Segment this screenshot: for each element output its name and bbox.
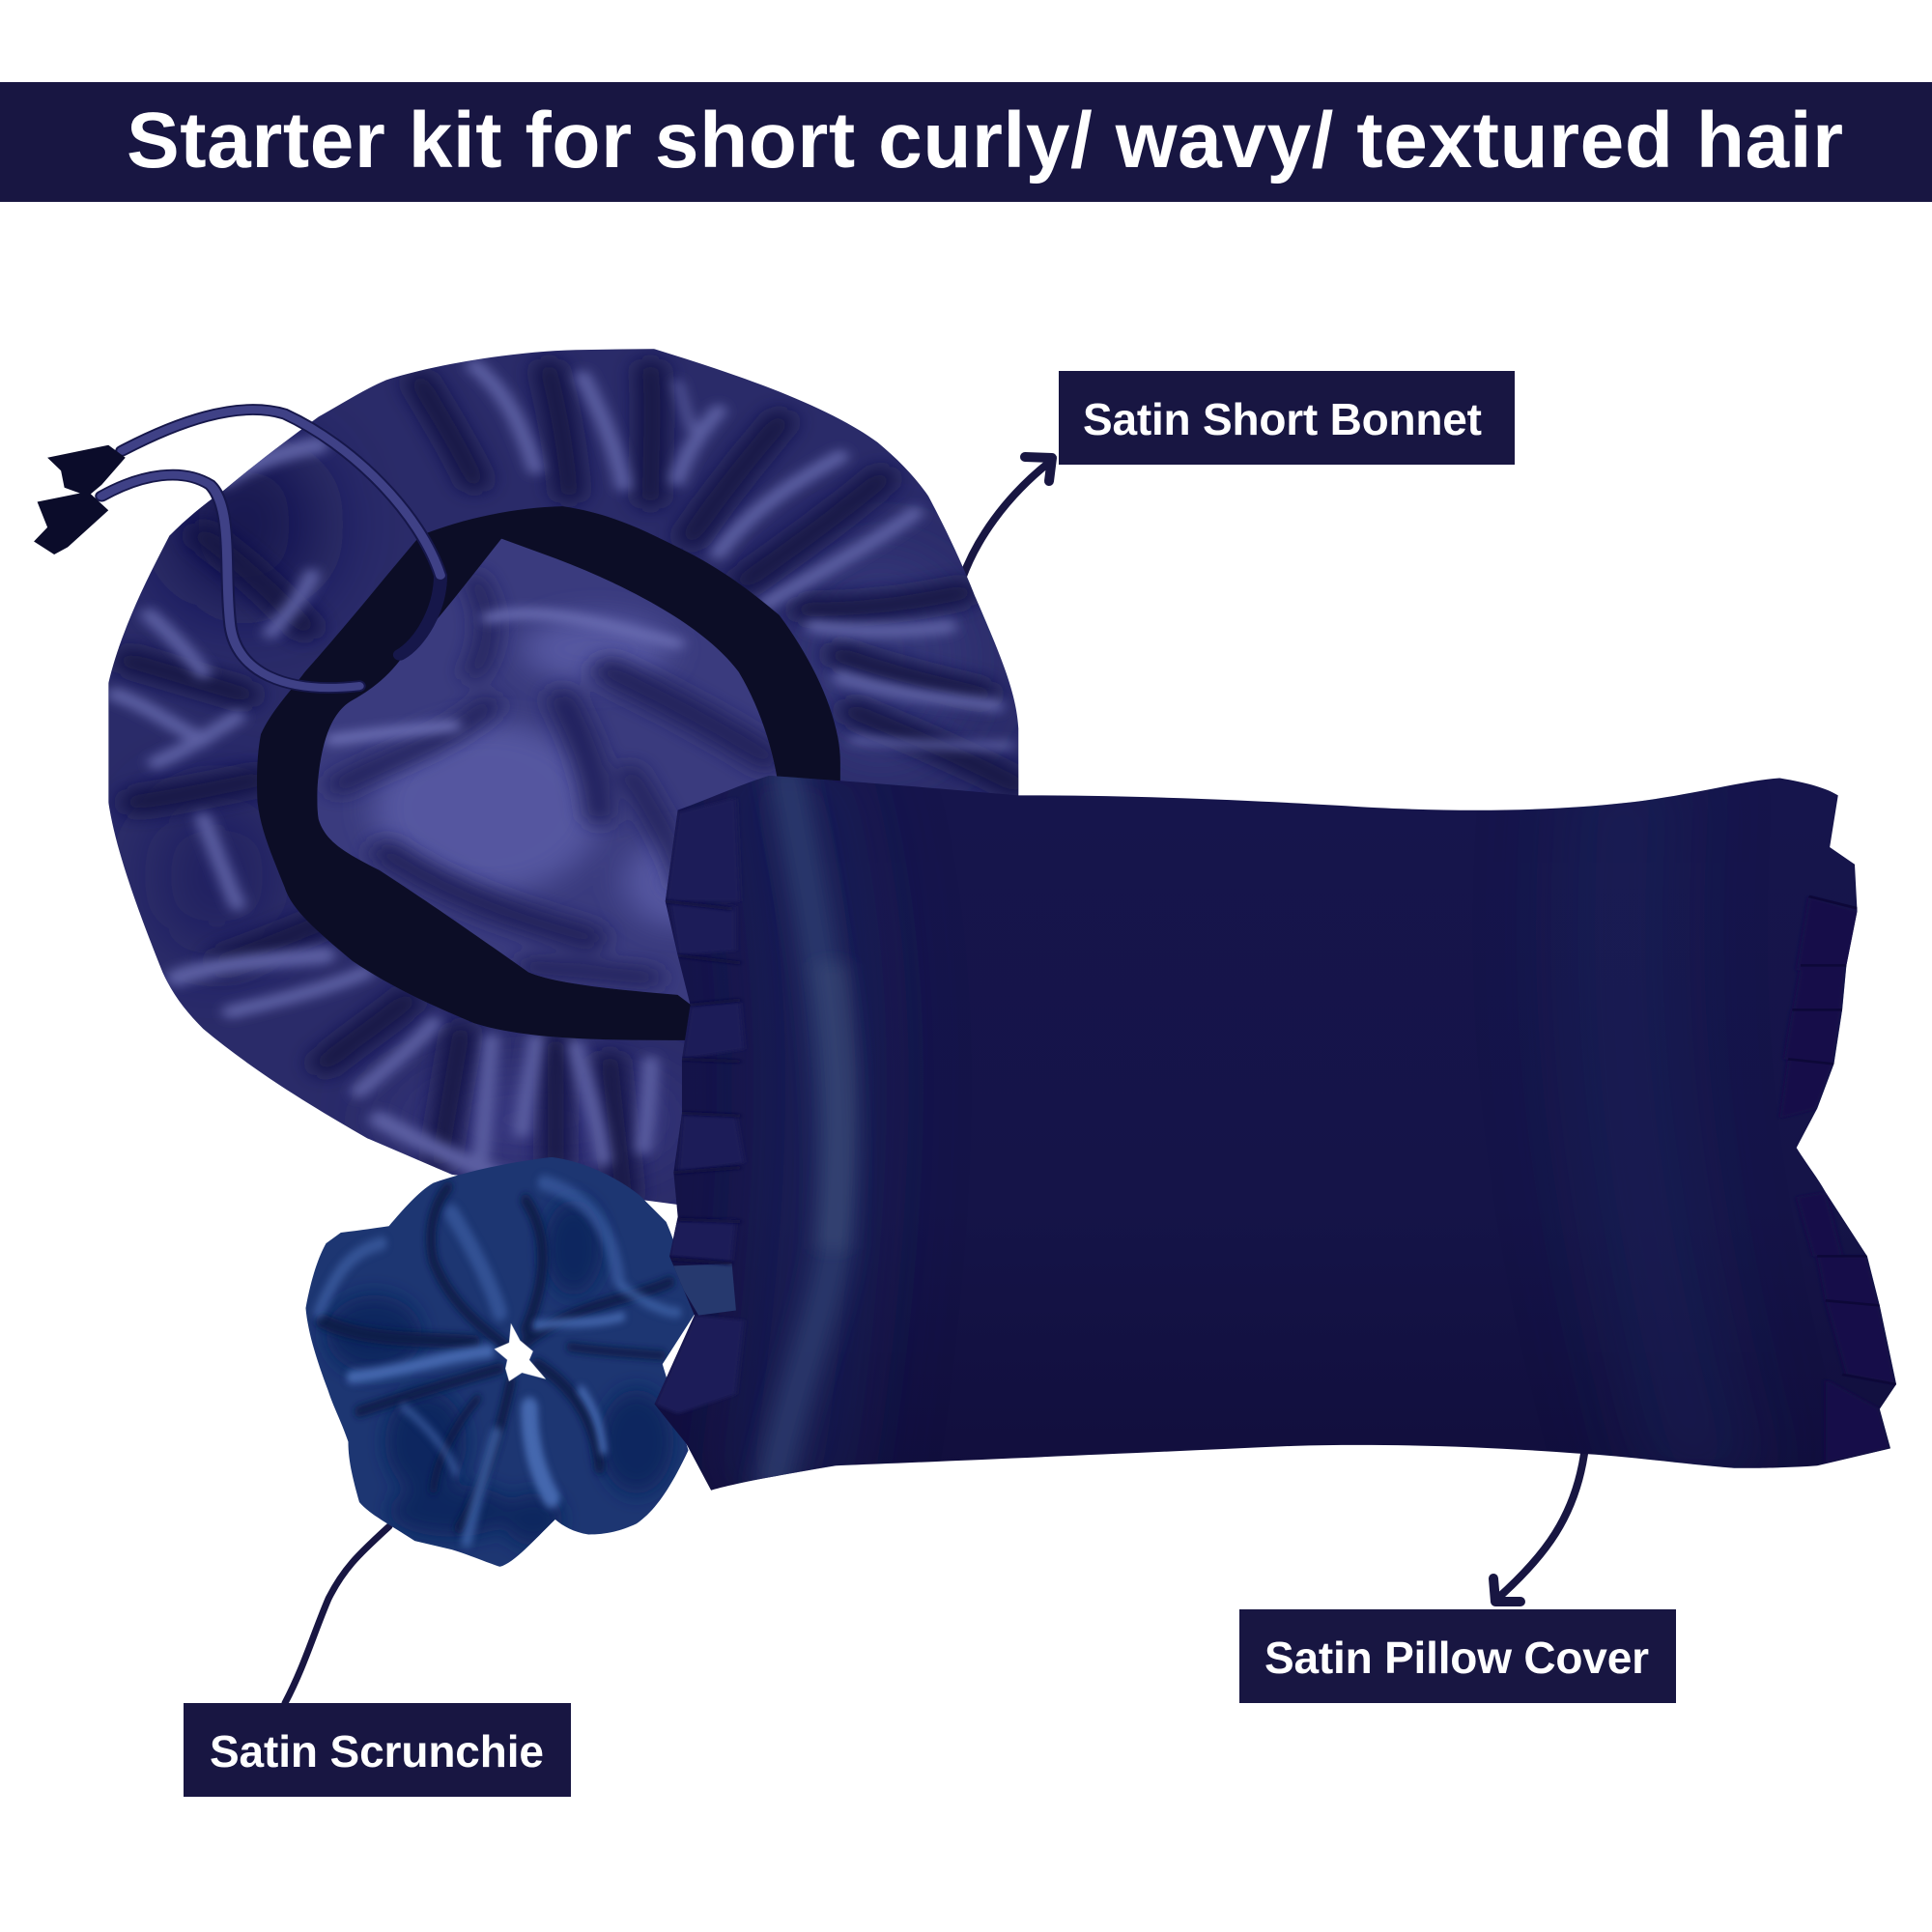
arrow: scrunchie to label [285, 1526, 389, 1703]
arrow: bonnet to label [962, 457, 1052, 579]
drawstring cords [101, 410, 440, 688]
pillow right pleats [1779, 896, 1896, 1463]
pillow left pleats [655, 798, 745, 1414]
pillow satin sheen [774, 773, 1701, 1483]
label: Satin Pillow Cover [1239, 1609, 1676, 1703]
label: Satin Short Bonnet: Satin Short Bonnet [1083, 394, 1482, 444]
velvet lining ring [257, 506, 840, 1046]
photo: satin scrunchie [305, 1157, 694, 1567]
bonnet inner satin [317, 539, 777, 1005]
label: Satin Scrunchie: Satin Scrunchie [210, 1726, 544, 1776]
drawstring tassels [34, 445, 126, 554]
label: Satin Pillow Cover: Satin Pillow Cover [1264, 1633, 1649, 1683]
label: Satin Short Bonnet [1059, 371, 1515, 465]
title banner [0, 82, 1932, 202]
scrunchie centre hole [495, 1323, 546, 1381]
bonnet broad tones [156, 440, 969, 1171]
photo: satin pillow cover [655, 773, 1896, 1491]
arrow: pillow to label [1493, 1454, 1584, 1602]
label: Satin Scrunchie [184, 1703, 571, 1797]
title banner: Starter kit for short curly/ wavy/ textured hair [127, 97, 1843, 185]
photo: satin short bonnet [34, 349, 1018, 1205]
